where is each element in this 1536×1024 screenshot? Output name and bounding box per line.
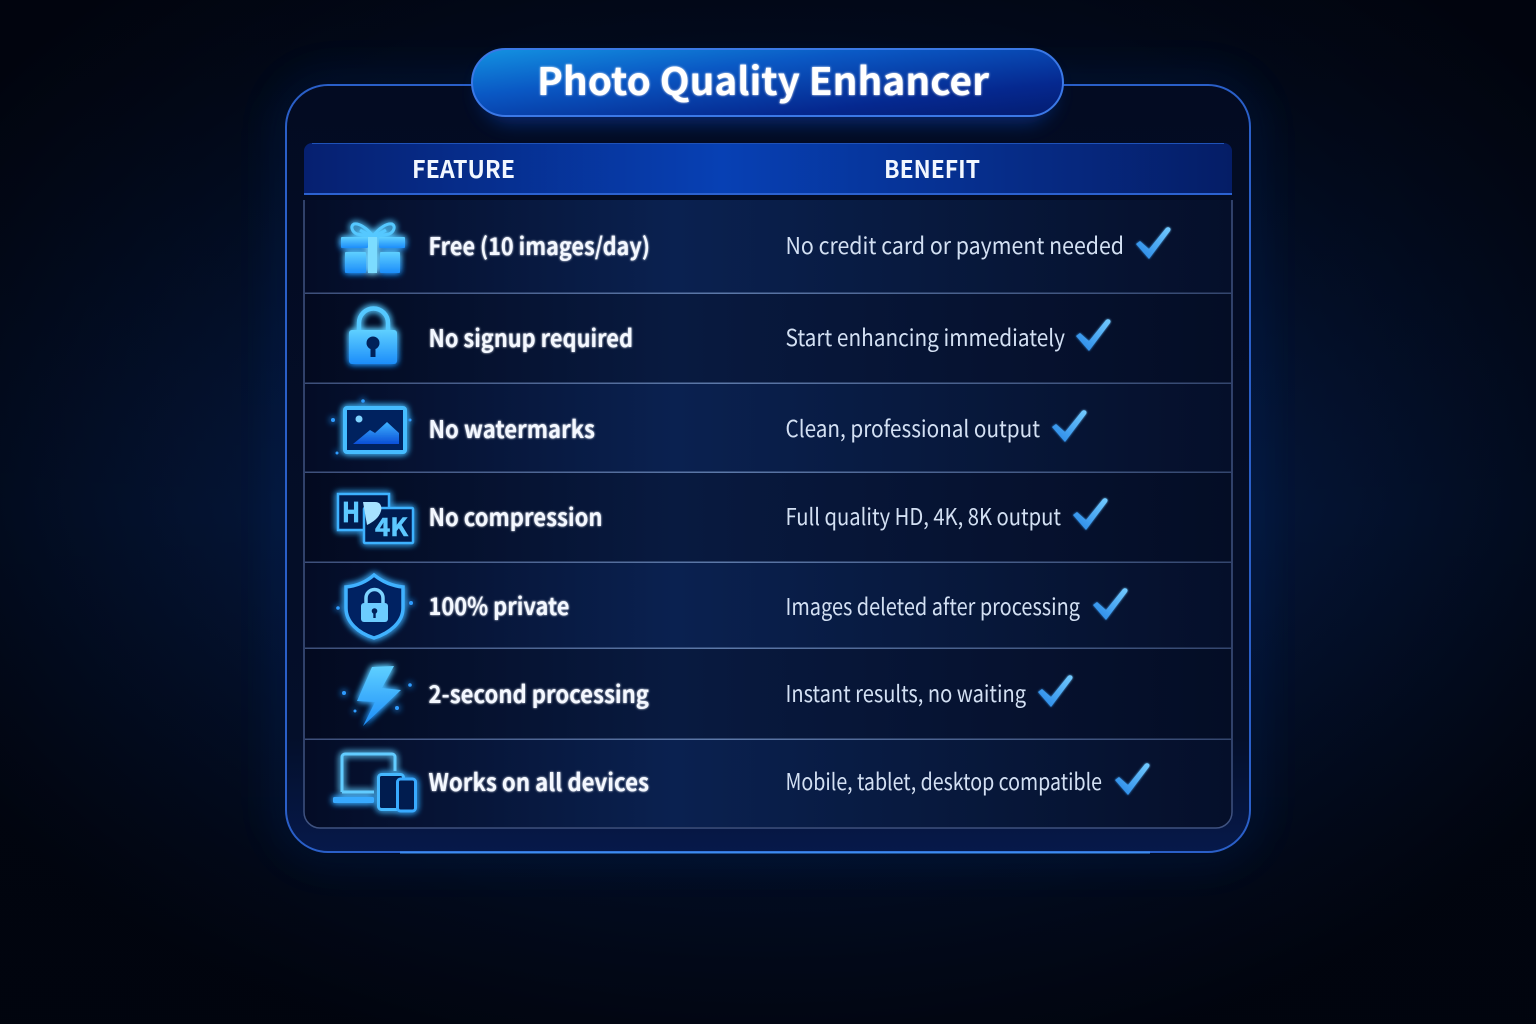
- title: Photo Quality Enhancer: [537, 51, 989, 106]
- icon: laptop, tablet and phone: [333, 754, 416, 811]
- row 5: private: [336, 575, 1128, 638]
- row 2: no signup: [349, 308, 1111, 364]
- feature text: No signup required: [428, 319, 633, 354]
- icon: check: [1052, 410, 1087, 442]
- icon: check: [1136, 227, 1171, 259]
- feature text: 2-second processing: [428, 675, 649, 710]
- panel: feature table card: [286, 85, 1250, 852]
- column heading: feature: FEATURE: [412, 150, 515, 185]
- icon: gift: [341, 224, 405, 273]
- icon: check: [1076, 319, 1111, 351]
- icon: check: [1073, 498, 1108, 530]
- benefit text: Mobile, tablet, desktop compatible: [786, 763, 1102, 797]
- feature text: Free (10 images/day): [428, 227, 650, 262]
- icon: shield: [336, 575, 413, 638]
- column heading: benefit: BENEFIT: [884, 150, 980, 185]
- row 3: no watermarks: [331, 399, 1087, 454]
- feature text: Works on all devices: [428, 763, 649, 798]
- icon: check: [1115, 763, 1150, 795]
- icon: padlock: [349, 308, 397, 364]
- row 6: speed: [342, 666, 1073, 726]
- benefit text: Instant results, no waiting: [786, 675, 1026, 709]
- benefit text: Clean, professional output: [786, 410, 1040, 444]
- row 4: no compression: [338, 491, 1108, 544]
- icon: check: [1038, 675, 1073, 707]
- row 1: free: [341, 224, 1171, 273]
- title pill: [472, 49, 1063, 124]
- table header: [304, 143, 1232, 194]
- row 7: devices: [333, 754, 1150, 811]
- icon: HD 4K: [338, 491, 413, 544]
- icon: lightning bolt: [342, 666, 412, 726]
- benefit text: No credit card or payment needed: [786, 227, 1124, 261]
- feature text: 100% private: [428, 587, 570, 622]
- icon: check: [1093, 588, 1128, 620]
- feature text: No watermarks: [428, 410, 595, 445]
- icon: HD 4K: 4K: [375, 508, 409, 544]
- feature text: No compression: [428, 498, 602, 533]
- benefit text: Full quality HD, 4K, 8K output: [786, 498, 1061, 532]
- benefit text: Images deleted after processing: [786, 588, 1080, 622]
- icon: picture: [331, 399, 412, 454]
- table body: [304, 200, 1232, 828]
- icon: HD 4K: H: [342, 491, 360, 530]
- benefit text: Start enhancing immediately: [786, 319, 1065, 353]
